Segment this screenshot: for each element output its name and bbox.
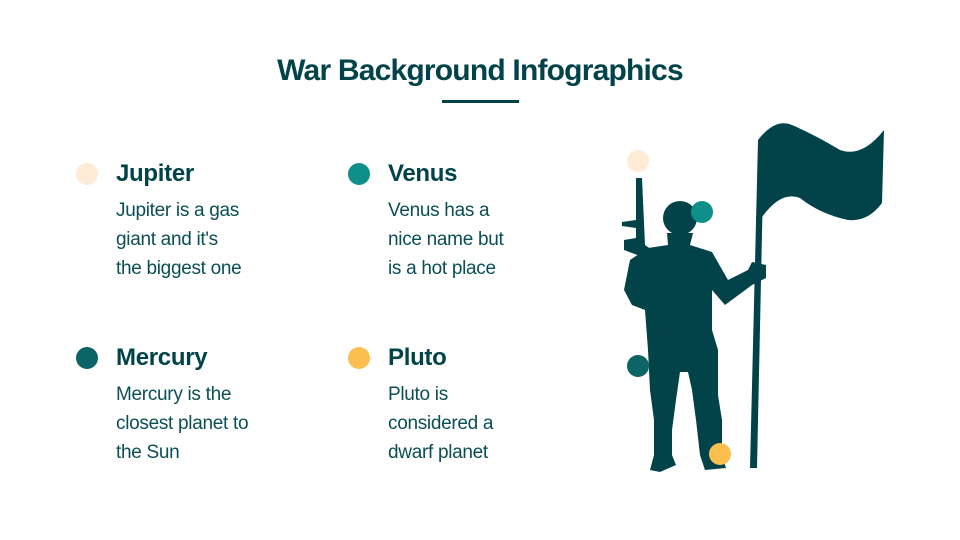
item: Venus: nice name but [388,229,503,250]
item: Mercury: Mercury is the [116,384,231,405]
item: Venus [348,160,504,279]
item: Jupiter: giant and it's [116,229,218,250]
item: Pluto: dwarf planet [388,442,488,463]
item: Pluto: Pluto is [388,384,448,405]
item: Jupiter: the biggest one [116,258,241,279]
item: Venus: is a hot place [388,258,496,279]
title: War Background Infographics [277,54,683,87]
item: Jupiter: Jupiter [116,160,194,187]
item: Pluto: considered a [388,413,493,434]
item: Jupiter: Jupiter is a gas [116,200,239,221]
item: Venus: Venus [388,160,457,187]
item: Pluto: Pluto [388,344,446,371]
dot: peach [627,150,649,172]
item: Jupiter [76,160,241,279]
item: Mercury [76,344,248,463]
dot: mid teal [627,355,649,377]
dot: teal [691,201,713,223]
item: Venus: Venus has a [388,200,489,221]
dot: yellow [709,443,731,465]
item: Mercury: the Sun [116,442,179,463]
item: Mercury: closest planet to [116,413,248,434]
item: Pluto [348,344,494,463]
item: Mercury: Mercury [116,344,207,371]
